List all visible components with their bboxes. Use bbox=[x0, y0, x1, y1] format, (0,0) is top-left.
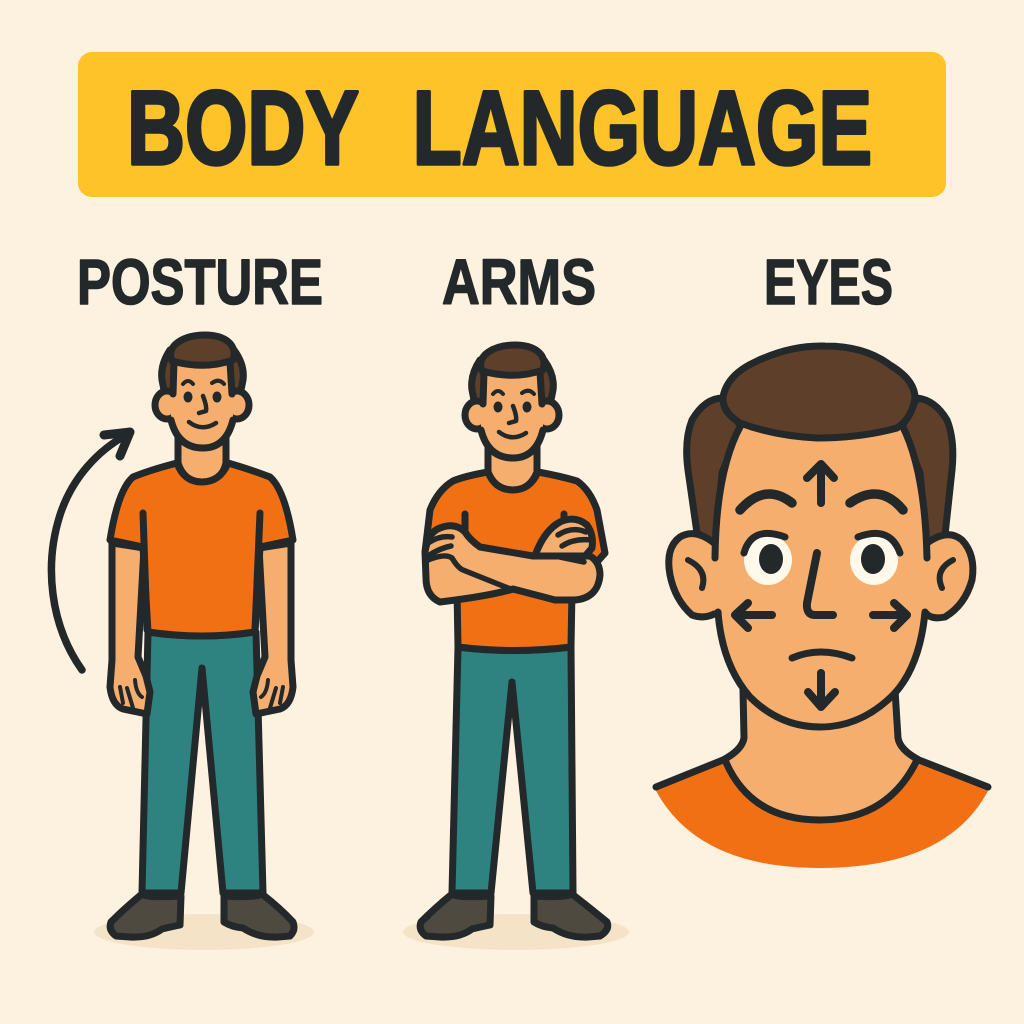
shirt bbox=[425, 472, 605, 650]
ears bbox=[669, 534, 973, 618]
neck bbox=[178, 435, 226, 482]
mouth bbox=[792, 652, 852, 658]
arrow: left bbox=[735, 603, 772, 628]
arms bbox=[110, 543, 293, 714]
shoes bbox=[420, 894, 608, 937]
neck bbox=[488, 445, 537, 490]
ground shadow bbox=[94, 914, 314, 950]
figure: large face with eye directions bbox=[654, 346, 990, 868]
arrow: up bbox=[807, 464, 834, 503]
face bbox=[708, 425, 934, 727]
ground shadow bbox=[403, 914, 629, 950]
face outline bbox=[715, 425, 927, 727]
shirt collar bbox=[654, 758, 990, 868]
figure: crossed arms bbox=[403, 345, 629, 950]
arrow: upright posture curve bbox=[51, 432, 130, 670]
trousers bbox=[452, 647, 573, 893]
eyebrows bbox=[740, 494, 903, 510]
figure: posture bbox=[94, 335, 314, 950]
top hair bbox=[723, 346, 915, 438]
trousers bbox=[142, 632, 263, 893]
head bbox=[465, 345, 559, 458]
crossed arms bbox=[425, 514, 600, 602]
neck bbox=[656, 680, 988, 820]
shirt bbox=[110, 463, 293, 636]
arrow: right bbox=[873, 603, 907, 628]
eyes bbox=[744, 533, 900, 585]
side hair bbox=[687, 398, 953, 545]
heading: arms: ARMS bbox=[442, 246, 596, 318]
arrow: down bbox=[808, 673, 835, 707]
shoes bbox=[110, 894, 294, 937]
inner ear lines bbox=[688, 560, 953, 588]
heading: posture: POSTURE bbox=[77, 246, 323, 318]
heading: eyes: EYES bbox=[764, 246, 893, 318]
head bbox=[155, 335, 249, 448]
nose bbox=[807, 553, 833, 615]
